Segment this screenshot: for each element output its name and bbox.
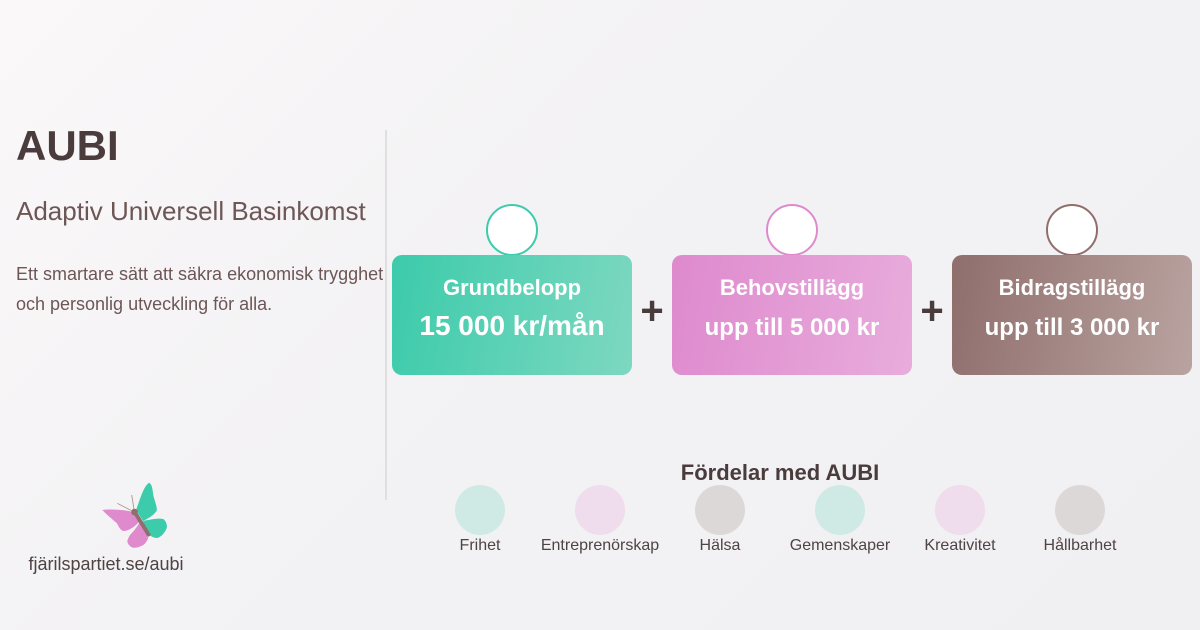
benefit: Frihet xyxy=(455,485,505,535)
divider xyxy=(385,130,387,500)
benefits heading: Fördelar med AUBI xyxy=(681,460,879,485)
icon: teal circle xyxy=(486,204,538,256)
card: Behovstillägg xyxy=(672,255,912,375)
text: Frihet xyxy=(460,537,500,554)
text: Kreativitet xyxy=(924,537,996,554)
text: Entreprenörskap xyxy=(541,537,659,554)
card: Grundbelopp: Grundbelopp xyxy=(443,275,581,300)
card: Behovstillägg: upp till 5 000 kr xyxy=(705,314,879,341)
benefit: Entreprenörskap xyxy=(575,485,625,535)
card: Behovstillägg: Behovstillägg xyxy=(720,275,864,300)
card: Grundbelopp xyxy=(392,255,632,375)
website link: fjärilspartiet.se/aubi xyxy=(28,554,184,574)
description text: Ett smartare sätt att säkra ekonomisk trygghet xyxy=(16,264,383,284)
text: Gemenskaper xyxy=(790,537,890,554)
card: Bidragstillägg: Bidragstillägg xyxy=(999,275,1145,300)
plus sign: + xyxy=(920,289,944,333)
card: Bidragstillägg: upp till 3 000 kr xyxy=(985,314,1159,341)
text: Hållbarhet xyxy=(1044,537,1116,554)
description text xyxy=(16,264,383,314)
card: Grundbelopp: 15 000 kr/mån xyxy=(419,310,605,341)
description text: och personlig utveckling för alla. xyxy=(16,294,272,314)
title: AUBI xyxy=(16,122,119,169)
benefit: Gemenskaper xyxy=(815,485,865,535)
plus sign: + xyxy=(640,289,664,333)
card: Bidragstillägg xyxy=(952,255,1192,375)
text: Hälsa xyxy=(700,537,740,554)
icon: brown circle xyxy=(1046,204,1098,256)
benefit: Hållbarhet xyxy=(1055,485,1105,535)
icon: butterfly logo xyxy=(102,482,167,548)
icon: pink circle xyxy=(766,204,818,256)
benefit: Kreativitet xyxy=(935,485,985,535)
subtitle: Adaptiv Universell Basinkomst xyxy=(16,196,366,226)
benefit: Hälsa xyxy=(695,485,745,535)
